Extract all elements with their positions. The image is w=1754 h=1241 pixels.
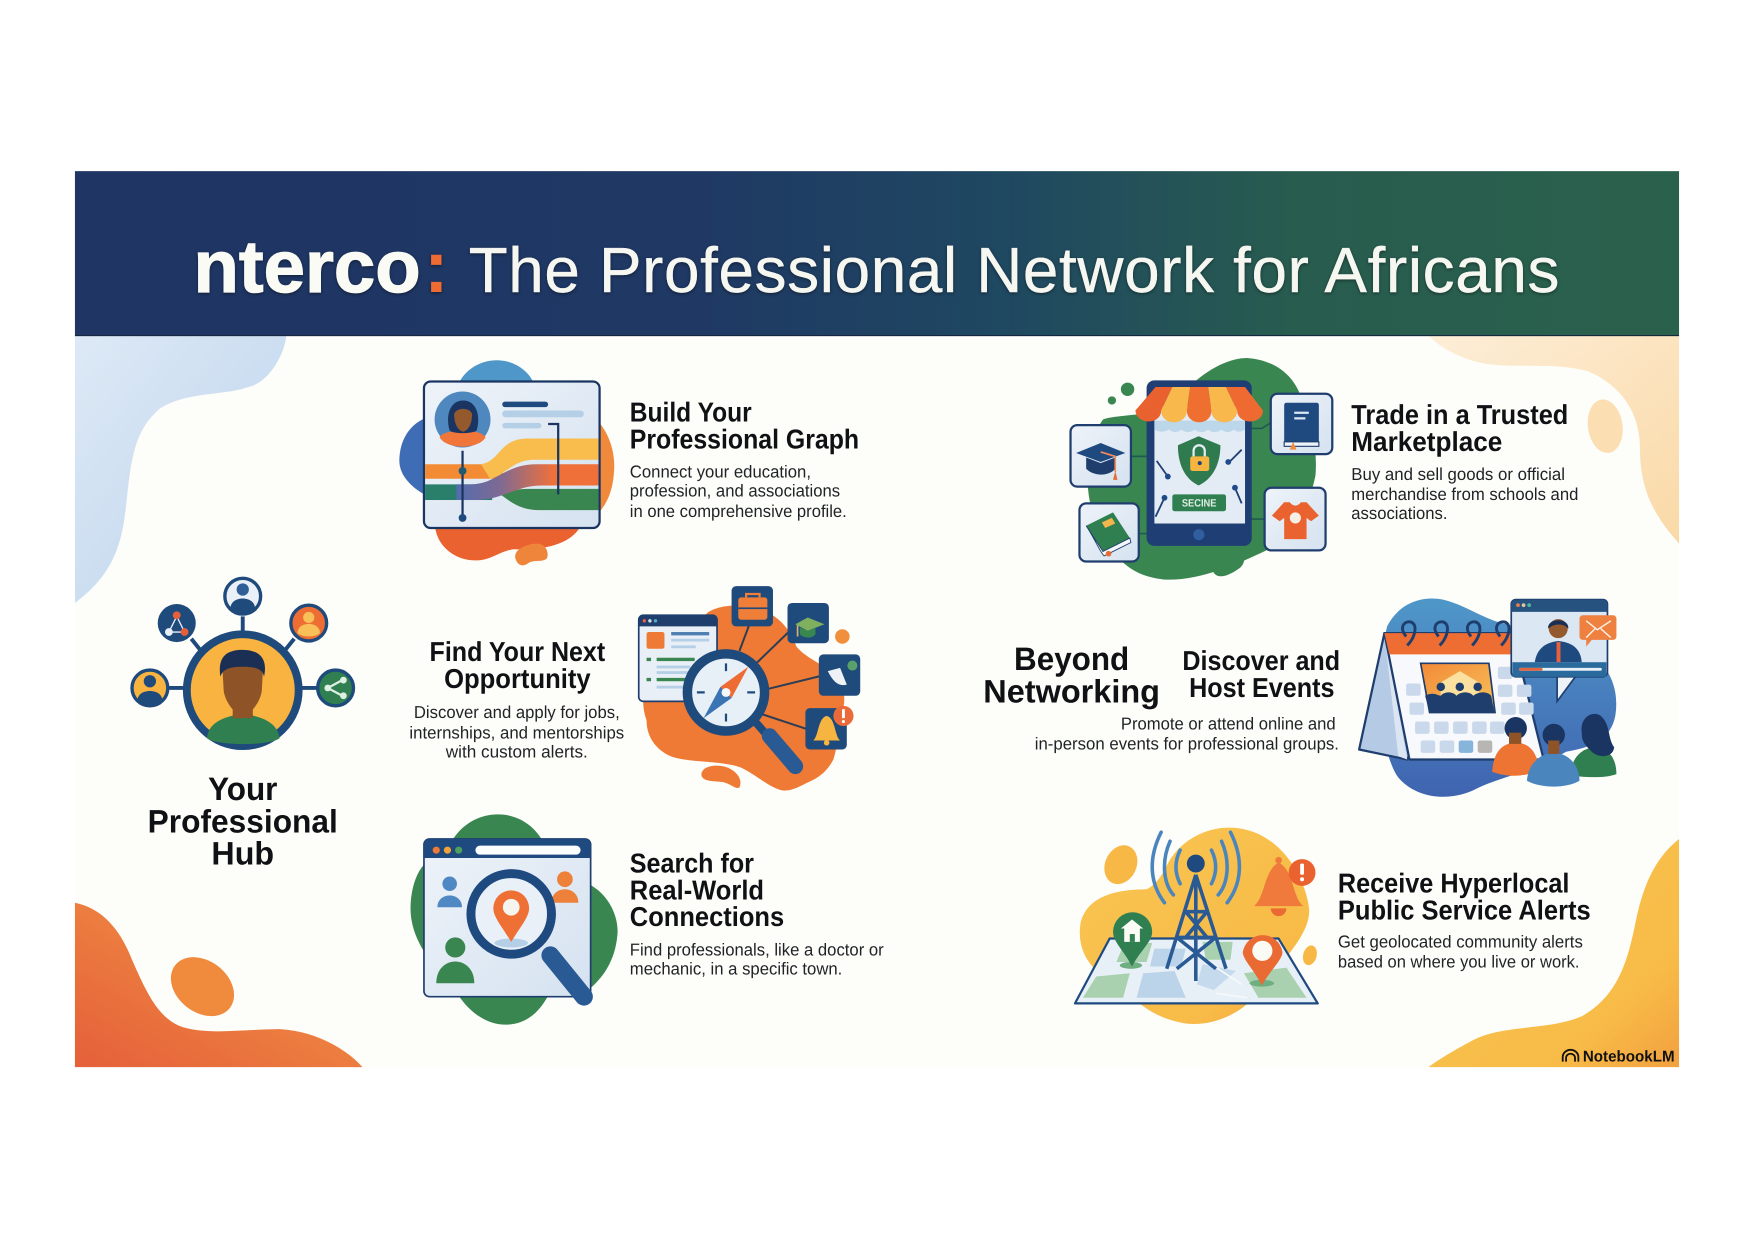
title (194, 225, 1559, 308)
text block: search for real-world connections: mechanic, in a specific town. (630, 960, 842, 979)
text block: receive hyperlocal public service alerts: based on where you live or work. (1338, 953, 1579, 972)
text block: receive hyperlocal public service alerts: Public Service Alerts (1338, 896, 1591, 926)
text block: find your next opportunity: Opportunity (444, 664, 591, 695)
heading: beyond networking (983, 642, 1160, 710)
text block: discover and host events: in-person events for professional groups. (1035, 735, 1339, 754)
title: The Professional Network for Africans (469, 235, 1559, 307)
text block: search for real-world connections: Connections (630, 903, 784, 933)
text block: search for real-world connections: Find professionals, like a doctor or (630, 941, 884, 960)
text block: search for real-world connections: Search for (630, 849, 754, 879)
text block: discover and host events: Promote or attend online and (1121, 715, 1336, 734)
heading: your professional hub: Your (208, 772, 277, 808)
icon: search browser with magnifier (411, 814, 618, 1025)
text block: find your next opportunity: Find Your Next (430, 638, 605, 668)
text block: build your professional graph: Connect your education, (630, 463, 811, 482)
decorative blob: bottom left orange (75, 903, 362, 1067)
text block: find your next opportunity: internships, and mentorships (409, 724, 624, 743)
text block: build your professional graph: Build Your (630, 398, 752, 428)
watermark: NotebookLM: NotebookLM (1583, 1047, 1675, 1065)
heading: your professional hub: Hub (211, 837, 274, 873)
text block: receive hyperlocal public service alerts: Receive Hyperlocal (1338, 869, 1569, 899)
text block: build your professional graph: Professional Graph (630, 425, 859, 455)
title: : (424, 225, 449, 308)
text block: trade in a trusted marketplace: merchandise from schools and (1351, 485, 1578, 504)
heading: your professional hub: Professional (148, 804, 338, 840)
text block: receive hyperlocal public service alerts (1338, 869, 1591, 972)
text block: receive hyperlocal public service alerts: Get geolocated community alerts (1338, 933, 1583, 952)
decorative blob: top left blue (75, 336, 286, 603)
text block: build your professional graph (630, 398, 859, 521)
decorative blob: top right cream (1428, 336, 1679, 544)
decorative oval: cream (1584, 397, 1626, 455)
text block: trade in a trusted marketplace: Buy and sell goods or official (1351, 465, 1565, 484)
text block: trade in a trusted marketplace: associations. (1351, 504, 1447, 524)
text block: find your next opportunity: with custom alerts. (445, 743, 588, 762)
icon: events calendar and video call (1359, 598, 1616, 797)
text block: trade in a trusted marketplace: Marketplace (1351, 427, 1502, 458)
heading: your professional hub (148, 772, 338, 873)
text block: trade in a trusted marketplace: Trade in a Trusted (1351, 400, 1568, 431)
icon: professional profile card (399, 360, 614, 565)
text block: trade in a trusted marketplace (1351, 400, 1578, 524)
text block: find your next opportunity (409, 638, 624, 762)
heading: beyond networking: Beyond (1014, 642, 1129, 678)
icon: professional hub network (132, 578, 353, 746)
text block: discover and host events (1035, 647, 1340, 754)
icon: trusted marketplace phone (1071, 358, 1332, 580)
text block: build your professional graph: in one comprehensive profile. (630, 502, 847, 521)
icon: opportunity compass magnifier (639, 586, 860, 791)
decorative oval: orange (159, 945, 246, 1028)
title: nterco (194, 225, 421, 308)
header banner (75, 171, 1679, 336)
text block: build your professional graph: profession, and associations (630, 482, 840, 501)
main panel background (75, 171, 1679, 1067)
icon: hyperlocal alerts tower and map (1075, 828, 1319, 1024)
decorative blob: bottom right yellow (1428, 839, 1679, 1067)
text block: discover and host events: Host Events (1189, 673, 1335, 704)
text block: search for real-world connections: Real-World (630, 876, 764, 906)
text block: discover and host events: Discover and (1182, 647, 1340, 677)
text block: find your next opportunity: Discover and apply for jobs, (414, 704, 620, 723)
text block: search for real-world connections (630, 849, 884, 979)
heading: beyond networking: Networking (983, 675, 1160, 710)
icon: trusted marketplace phone: SECINE (1182, 498, 1217, 510)
